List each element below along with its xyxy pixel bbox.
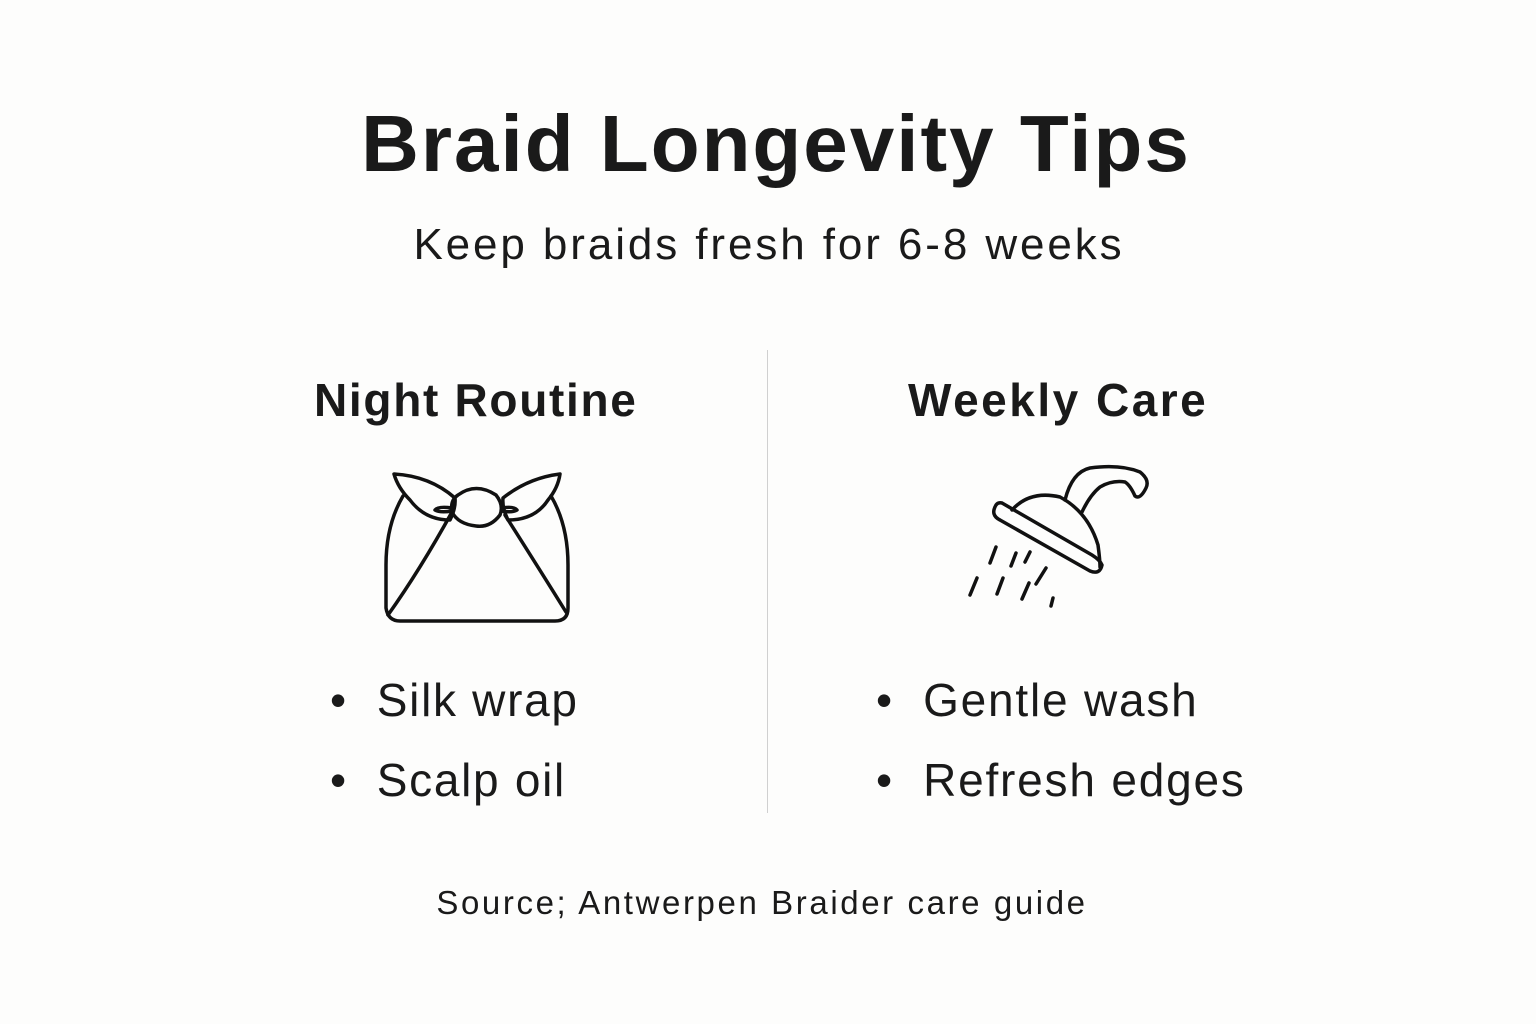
list: weekly care (876, 674, 1246, 806)
source: Source; Antwerpen Braider care guide (436, 884, 1088, 921)
list: night routine: • Silk wrap (330, 674, 579, 726)
title: Braid Longevity Tips (361, 99, 1191, 188)
heading: weekly care: Weekly Care (908, 374, 1208, 426)
list: weekly care: • Refresh edges (876, 754, 1246, 806)
subtitle: Keep braids fresh for 6-8 weeks (413, 220, 1125, 269)
list: night routine (330, 674, 579, 806)
list: weekly care: • Gentle wash (876, 674, 1199, 726)
list: night routine: • Scalp oil (330, 754, 566, 806)
heading: night routine: Night Routine (314, 374, 638, 426)
divider (767, 350, 768, 813)
